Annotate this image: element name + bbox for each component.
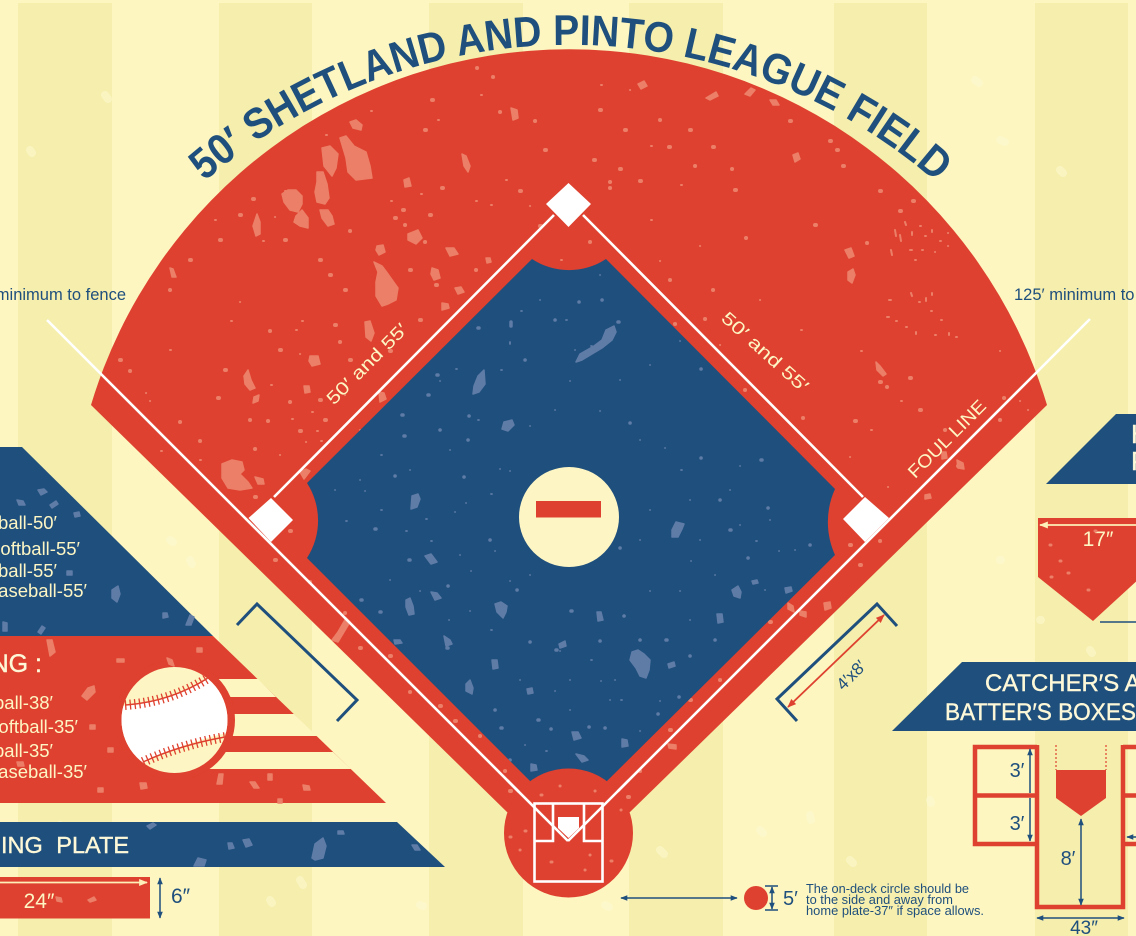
on-deck size: 5′	[783, 888, 798, 910]
plate width label: 17″	[1083, 528, 1114, 551]
home plate circle	[504, 768, 633, 898]
batter's box depth labels: 3′	[1010, 760, 1025, 782]
field: infield	[307, 259, 835, 820]
on-field bracket: right coach's box with 4x8 dimension	[777, 604, 897, 721]
icon: baseball	[122, 667, 228, 773]
on-deck note: to the side and away from	[806, 893, 953, 907]
plate width label: 24″	[24, 890, 55, 913]
on-deck note: home plate-37″ if space allows.	[806, 904, 984, 918]
catcher's box length: 8′	[1061, 848, 1076, 870]
pitching list	[0, 692, 88, 782]
on-deck note	[806, 882, 984, 918]
panel: catcher's and batter's boxes heading	[892, 662, 1136, 731]
texture on side panels	[3, 489, 420, 902]
pitcher's rubber	[536, 501, 601, 518]
texture on blue infield	[335, 275, 810, 771]
label: left base distance: 50′ and 55′	[322, 319, 412, 409]
field: outfield and foul territory	[91, 49, 1047, 872]
on-deck note: The on-deck circle should be	[806, 882, 969, 896]
field: foul lines and base paths	[47, 215, 1090, 841]
icon: second base	[546, 183, 591, 227]
panel: home plate heading	[1046, 414, 1136, 484]
label: foul line: FOUL LINE	[904, 396, 990, 482]
panel: pitching plate heading	[0, 822, 445, 867]
panel: pitching distance	[0, 636, 386, 803]
home plate area markings	[507, 780, 629, 882]
label: right base distance: 50′ and 55′	[717, 308, 813, 397]
icon: third base	[248, 498, 293, 542]
icon: first base	[843, 497, 889, 542]
pitcher's circle	[519, 467, 619, 567]
panel: base paths distance	[0, 447, 213, 636]
title: 50′ SHETLAND AND PINTO LEAGUE FIELD	[188, 15, 949, 178]
on-field bracket: left coach's box	[237, 604, 357, 721]
catcher's and batter's boxes diagram	[975, 745, 1136, 936]
home plate diagram	[1038, 518, 1136, 622]
batter's box depth labels: 3′	[1010, 813, 1025, 835]
pitching plate diagram	[0, 877, 191, 918]
texture on red dirt	[120, 60, 1028, 802]
plate depth label: 6″	[171, 885, 191, 908]
on-deck circle group	[621, 882, 984, 918]
distance list	[0, 512, 88, 601]
coach's box size: 4′x8′	[833, 657, 870, 694]
batter's box depth labels	[1010, 760, 1025, 835]
